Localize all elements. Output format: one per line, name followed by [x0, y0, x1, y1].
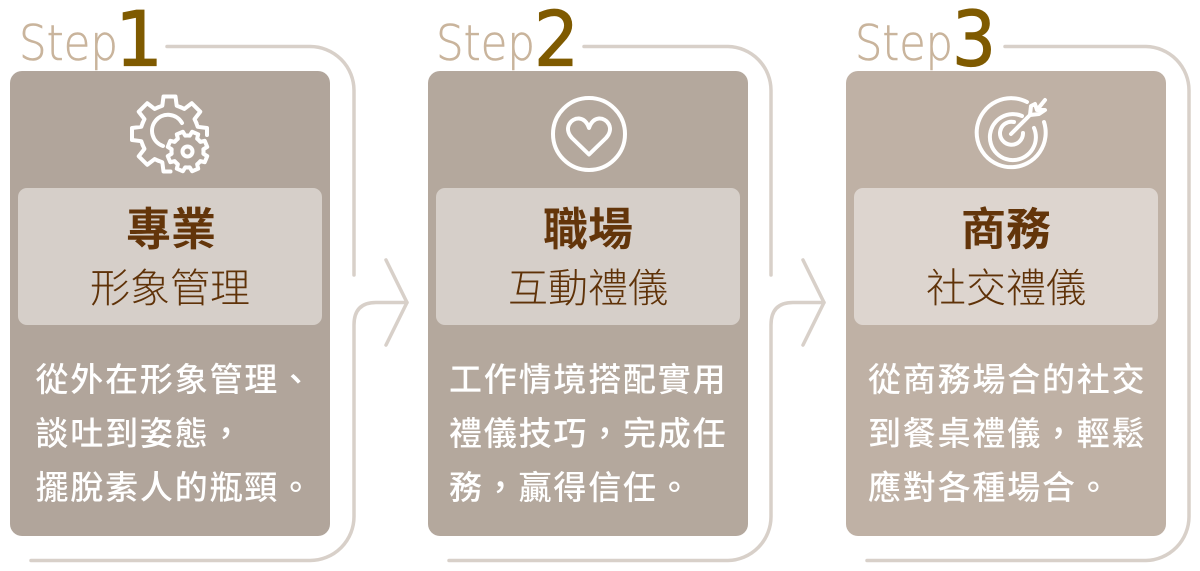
arrow: step 2 to step 3	[803, 260, 824, 345]
step label: Step 3: Step	[855, 15, 953, 72]
text block: step 3 description: 從商務場合的社交	[868, 361, 1146, 398]
text block: step 2 description: 工作情境搭配實用	[449, 361, 727, 398]
icon: heart in circle	[553, 98, 625, 170]
text block: step 1 description	[36, 361, 314, 506]
text block: step 3 description	[868, 361, 1146, 506]
text block: step 2 description: 務，贏得信任。	[449, 469, 693, 506]
step label: Step 3	[855, 0, 996, 84]
panel: step 1	[10, 0, 407, 560]
heading panel: step 1	[18, 188, 322, 325]
step label: Step 2	[436, 0, 579, 84]
connector line: step 1 frame top	[167, 46, 354, 275]
subheading: 形象管理: 形象管理	[90, 267, 250, 311]
card: step 2	[428, 71, 748, 536]
step label: Step 2: Step	[436, 15, 535, 72]
text block: step 1 description: 談吐到姿態，	[36, 415, 244, 452]
panel: step 2	[428, 0, 824, 560]
connector line: step 3 frame	[867, 46, 1189, 560]
heading panel: step 2	[436, 188, 740, 325]
text block: step 1 description: 從外在形象管理、	[36, 361, 314, 398]
connector line: step 2 frame top	[584, 46, 771, 275]
icon: target with arrow	[977, 98, 1046, 167]
arrow: step 1 to step 2	[386, 260, 407, 345]
text block: step 3 description: 應對各種場合。	[868, 469, 1112, 506]
text block: step 2 description: 禮儀技巧，完成任	[449, 415, 727, 452]
panel: step 3	[846, 0, 1189, 560]
text block: step 3 description: 到餐桌禮儀，輕鬆	[868, 415, 1146, 452]
subheading: 社交禮儀: 社交禮儀	[926, 267, 1086, 311]
connector line: step 2 frame bottom	[449, 302, 824, 560]
text block: step 2 description	[449, 361, 727, 506]
card: step 1	[10, 71, 330, 536]
subheading: 互動禮儀: 互動禮儀	[508, 267, 668, 311]
heading: 職場: 職場	[543, 204, 633, 255]
connector line: step 1 frame bottom	[31, 302, 407, 560]
card: step 3	[846, 71, 1166, 536]
heading: 商務: 商務	[961, 204, 1051, 255]
step label: Step 1: Step	[19, 15, 118, 72]
text block: step 1 description: 擺脫素人的瓶頸。	[36, 469, 314, 506]
heading panel: step 3	[854, 188, 1158, 325]
step label: Step 1	[19, 0, 163, 84]
icon: gears	[132, 96, 208, 172]
heading: 專業: 專業	[126, 204, 216, 255]
